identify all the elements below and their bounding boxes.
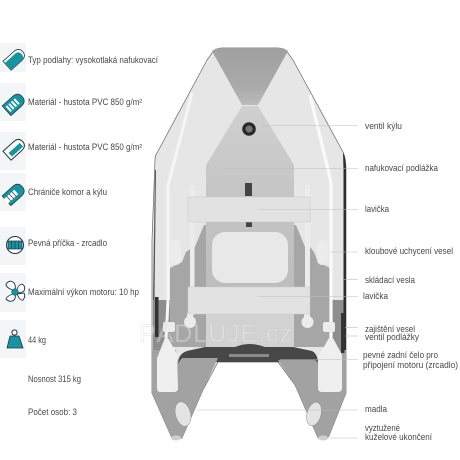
spec: transom: Pevná příčka - zrcadlo <box>28 238 107 248</box>
right part labels: kloubové uchycení vesel <box>365 246 453 256</box>
gray inner tube right <box>294 225 330 347</box>
bench rails <box>184 185 314 328</box>
floor straps <box>245 183 252 196</box>
spec: material 2 <box>0 132 142 170</box>
lower floor <box>205 313 295 347</box>
left oar <box>166 93 192 340</box>
watermark: PÁDLUJE.cz <box>139 319 292 348</box>
spec: weight <box>0 320 46 358</box>
dark side edges <box>343 152 346 355</box>
spec: floor type: Typ podlahy: vysokotlaká nafukovací <box>28 55 158 65</box>
right part labels: nafukovací podlážka <box>365 163 438 173</box>
transom bracket <box>229 354 269 357</box>
left paddle <box>157 338 178 392</box>
right part labels: lavička <box>363 291 388 301</box>
right part labels: vyztužené <box>365 423 400 433</box>
gray inner tube left <box>170 225 206 347</box>
boat illustration <box>152 48 346 440</box>
carry handles <box>173 400 324 428</box>
right part labels <box>363 121 458 442</box>
right part labels: ventil podlážky <box>365 332 420 342</box>
right paddle <box>318 338 342 392</box>
left spec list <box>0 43 158 417</box>
transom <box>178 344 318 364</box>
right part labels: lavička <box>365 204 389 214</box>
reinforced cone tips <box>171 436 328 440</box>
bench 2 <box>188 287 310 314</box>
right part labels: ventil kýlu <box>365 121 402 131</box>
right part labels: pevné zadní čelo pro <box>363 350 438 360</box>
keel valve <box>242 122 256 136</box>
right part labels: skládací vesla <box>365 275 415 285</box>
inflatable floor <box>206 106 294 347</box>
stern tube ends <box>152 350 218 439</box>
spec: engine power: Maximální výkon motoru: 10 hp <box>28 287 139 297</box>
spec: persons: Počet osob: 3 <box>28 407 77 417</box>
spec: load capacity: Nosnost 315 kg <box>28 374 81 384</box>
boat hull <box>152 48 346 439</box>
side printing <box>155 297 344 353</box>
leader lines <box>197 126 358 438</box>
oar locks <box>163 240 335 332</box>
right oar <box>310 95 331 340</box>
right part labels: kuželové ukončení <box>365 432 433 442</box>
right part labels: madla <box>365 404 387 414</box>
bow panel <box>212 48 288 105</box>
spec: chamber protectors: Chrániče komor a kýlu <box>28 187 107 197</box>
spec: material 1 <box>0 83 142 121</box>
spec: chamber protectors <box>0 173 107 211</box>
spec: floor type <box>0 43 158 72</box>
spec: transom <box>0 227 107 265</box>
spec: material 1: Materiál - hustota PVC 850 g/m² <box>28 97 142 107</box>
seat cushion <box>212 232 288 283</box>
bench 1 <box>188 197 310 222</box>
spec: weight: 44 kg <box>28 335 46 345</box>
spec: engine power <box>0 273 139 312</box>
outer lower strips <box>153 300 170 362</box>
right part labels: zajištění vesel <box>365 324 415 334</box>
spec: material 2: Materiál - hustota PVC 850 g/m² <box>28 142 142 152</box>
